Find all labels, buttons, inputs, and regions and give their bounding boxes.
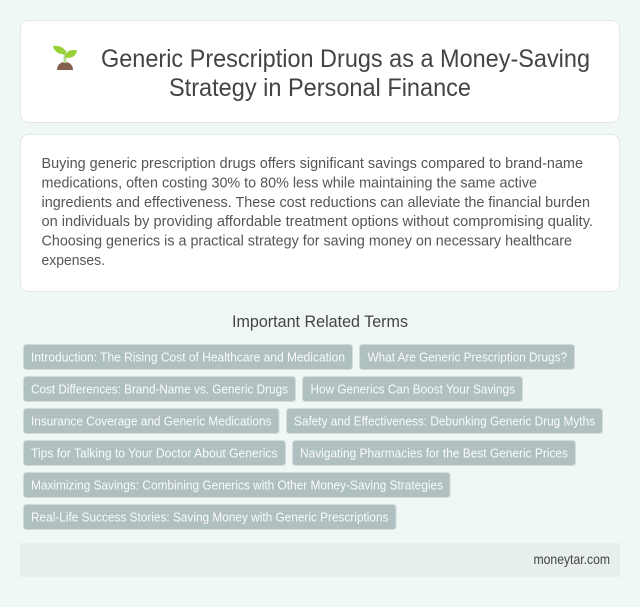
tag: safety and effectiveness: Safety and Effectiveness: Debunking Generic Drug Myths	[294, 414, 595, 428]
summary paragraph: Choosing generics is a practical strategy for saving money on necessary healthcare	[42, 233, 572, 250]
summary paragraph: medications, often costing 30% to 80% less while maintaining the same active	[42, 174, 537, 191]
tag: success stories	[24, 504, 396, 530]
tag: what are generics: What Are Generic Prescription Drugs?	[368, 350, 567, 364]
tag: success stories: Real-Life Success Stories: Saving Money with Generic Prescriptions	[31, 510, 389, 524]
tag: cost differences: Cost Differences: Brand-Name vs. Generic Drugs	[31, 382, 288, 396]
panel: title card	[20, 20, 620, 122]
tag: boost savings: How Generics Can Boost Your Savings	[310, 382, 515, 396]
summary paragraph	[42, 155, 593, 269]
tag: talking to your doctor	[24, 440, 286, 466]
tag: talking to your doctor: Tips for Talking to Your Doctor About Generics	[31, 446, 278, 460]
panel: summary card	[20, 134, 620, 292]
tag: navigating pharmacies: Navigating Pharmacies for the Best Generic Prices	[300, 446, 568, 460]
tag: insurance coverage: Insurance Coverage and Generic Medications	[31, 414, 272, 428]
icon: seedling	[53, 46, 77, 70]
summary paragraph: ingredients and effectiveness. These cost reductions can alleviate the financial burden	[42, 194, 590, 211]
summary paragraph: Buying generic prescription drugs offers significant savings compared to brand-name	[42, 155, 583, 172]
tag: introduction	[24, 344, 352, 370]
title: Generic Prescription Drugs as a Money-Saving	[101, 45, 590, 73]
tag: maximizing savings	[24, 472, 450, 498]
panel: related term tags	[24, 344, 602, 530]
tag: what are generics	[360, 344, 574, 370]
tag: cost differences	[24, 376, 296, 402]
tag: maximizing savings: Maximizing Savings: Combining Generics with Other Money-Saving Strategies	[31, 478, 443, 492]
heading: important related terms: Important Related Terms	[232, 312, 408, 331]
summary paragraph: on individuals by providing affordable treatment options without compromising quality.	[42, 213, 593, 230]
summary paragraph: expenses.	[42, 252, 105, 269]
tag: safety and effectiveness	[286, 408, 602, 434]
footer site name: moneytar.com	[534, 552, 610, 567]
title	[101, 45, 590, 102]
tag: navigating pharmacies	[292, 440, 576, 466]
tag: introduction: Introduction: The Rising Cost of Healthcare and Medication	[31, 350, 345, 364]
title: Strategy in Personal Finance	[169, 74, 471, 102]
footer	[20, 543, 620, 577]
tag: boost savings	[302, 376, 522, 402]
tag: insurance coverage	[24, 408, 279, 434]
